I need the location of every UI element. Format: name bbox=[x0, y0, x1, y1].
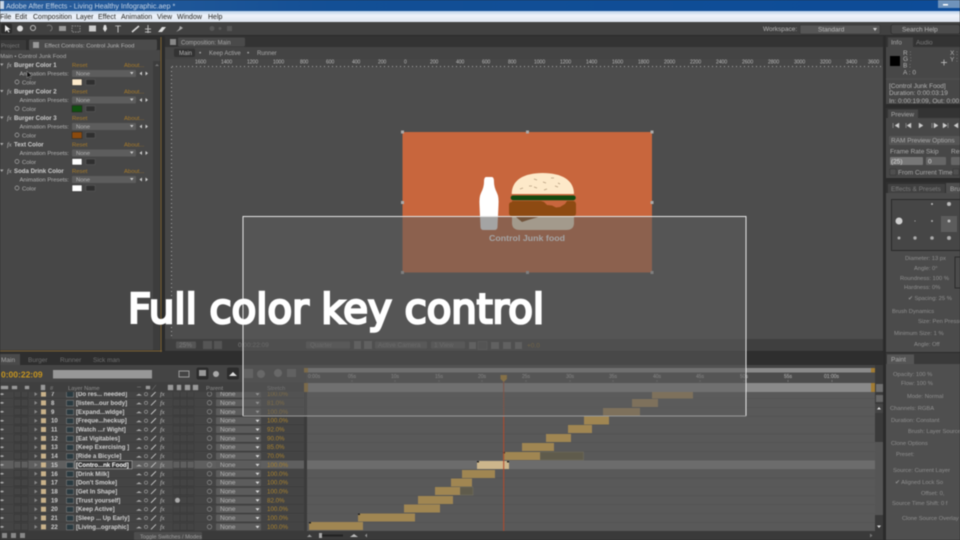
viewer controls bbox=[165, 339, 883, 351]
comp ruler: 600 bbox=[326, 60, 335, 66]
effect: Soda Drink Color: About... bbox=[124, 169, 145, 175]
effect: Burger Color 3: None bbox=[76, 124, 91, 130]
row 12: [Eat Vigitables] bbox=[76, 435, 120, 442]
panel: brushes: Diameter: 13 px bbox=[905, 256, 946, 262]
row 15 selected: [Contro...nk Food] bbox=[76, 462, 129, 469]
panel: brushes bbox=[886, 182, 960, 352]
effect: Burger Color 1: Animation Presets: bbox=[20, 72, 69, 78]
panel: brushes: Minimum Size: 1 % bbox=[894, 331, 944, 337]
row 16: 16 bbox=[51, 471, 58, 478]
row 11: 92.0% bbox=[267, 426, 285, 434]
comp ruler: 1600 bbox=[195, 60, 206, 66]
row 15 selected: 15 bbox=[51, 462, 58, 469]
panel: preview: (25) bbox=[891, 158, 903, 166]
row 16: [Drink Milk] bbox=[76, 471, 109, 478]
comp ruler: 2800 bbox=[768, 60, 779, 66]
effect: Burger Color 1: Reset bbox=[72, 63, 88, 69]
time ruler: 20s bbox=[478, 374, 487, 380]
effect: Text Color: Color bbox=[22, 160, 36, 166]
viewer controls: +0.0 bbox=[527, 342, 540, 350]
row 17: [Don't Smoke] bbox=[76, 480, 117, 487]
viewer controls: 25% bbox=[179, 342, 192, 349]
row 22: [Living...ographic] bbox=[76, 524, 129, 531]
panel: paint: Mode: Normal bbox=[907, 394, 943, 400]
menu bar: Composition bbox=[33, 14, 72, 21]
window title bar: Adobe After Effects - Living Healthy Infographic.aep * bbox=[6, 2, 175, 10]
row 12 bbox=[0, 435, 306, 442]
time ruler: 10s bbox=[391, 374, 400, 380]
effect: Burger Color 3: Burger Color 3 bbox=[14, 115, 57, 122]
menu bar: View bbox=[157, 14, 173, 21]
row 22: fx bbox=[160, 524, 165, 531]
row 9: [Expand...wldge] bbox=[76, 409, 124, 416]
time ruler: 50s bbox=[740, 374, 749, 380]
row 19: None bbox=[220, 497, 236, 504]
row 19: [Trust yourself] bbox=[76, 497, 120, 504]
panel: right column info: [Control Junk Food] bbox=[889, 83, 946, 90]
row 20: [Keep Active] bbox=[76, 506, 115, 513]
row 21: None bbox=[220, 515, 236, 522]
row 8: [listen...our body] bbox=[76, 400, 127, 407]
panel: preview bbox=[886, 108, 960, 178]
panel: preview: From Current Time bbox=[898, 170, 953, 176]
viewer controls: 0:00:22:09 bbox=[238, 342, 269, 349]
row 17: 17 bbox=[51, 480, 58, 487]
comp ruler: 1600 bbox=[612, 60, 623, 66]
row 17: 100.0% bbox=[267, 480, 288, 487]
row 20: None bbox=[220, 506, 236, 513]
row 11: None bbox=[220, 426, 236, 434]
timeline tabs bbox=[0, 352, 883, 365]
comp ruler: 1200 bbox=[247, 60, 258, 66]
row 21: 21 bbox=[51, 515, 58, 522]
effect: Text Color: About... bbox=[124, 142, 145, 148]
row 10: 10 bbox=[51, 418, 58, 425]
headline: Full color key control: Full color key control bbox=[128, 285, 544, 333]
effect: Burger Color 2: Burger Color 2 bbox=[14, 88, 57, 96]
row 19: fx bbox=[160, 497, 165, 504]
panel: paint: Offset: 0, bbox=[921, 491, 945, 497]
time ruler: 25s bbox=[522, 374, 531, 380]
row 18: 18 bbox=[51, 488, 58, 496]
effect: Burger Color 2 bbox=[0, 88, 148, 113]
row 19 bbox=[0, 497, 306, 504]
menu bar: Effect bbox=[98, 14, 116, 21]
time ruler: 30s bbox=[566, 374, 575, 380]
timeline footer bbox=[0, 531, 883, 540]
row 15 selected: fx bbox=[160, 462, 165, 469]
panel: effect controls: Project bbox=[1, 44, 20, 50]
comp ruler: 800 bbox=[300, 60, 309, 66]
row 18 bbox=[0, 488, 306, 496]
comp ruler: 1000 bbox=[273, 60, 284, 66]
row 10: [Freque...heckup] bbox=[76, 418, 127, 425]
row 21: 100.0% bbox=[267, 515, 288, 522]
panel: right column info: A : 0 bbox=[903, 70, 916, 76]
caption: Control Junk food bbox=[489, 233, 565, 243]
effect: Burger Color 3: fx bbox=[7, 115, 12, 122]
row 12: 12 bbox=[51, 435, 58, 442]
row 22: 22 bbox=[51, 524, 58, 531]
time navigator bbox=[304, 368, 875, 372]
panel: preview: Frame Rate bbox=[890, 148, 925, 156]
row 22: 100.0% bbox=[267, 524, 288, 531]
panel: right column info: R : bbox=[903, 50, 912, 57]
work area bar bbox=[304, 383, 875, 392]
comp ruler: 800 bbox=[508, 60, 517, 66]
panel: paint: Paint bbox=[891, 356, 906, 364]
row 19: 82.0% bbox=[267, 497, 285, 504]
toolbar: Workspace: bbox=[763, 26, 797, 33]
panel: paint: Duration: Constant bbox=[891, 418, 940, 424]
panel: right column info: Info bbox=[891, 40, 902, 46]
row 17: fx bbox=[160, 480, 165, 487]
time ruler: 45s bbox=[696, 374, 705, 380]
menu bar bbox=[0, 11, 960, 22]
effect: Burger Color 3: Color bbox=[22, 134, 36, 140]
timeline tabs: Main bbox=[1, 357, 15, 364]
effect: Burger Color 2: None bbox=[76, 98, 91, 104]
effect: Burger Color 3: About... bbox=[124, 116, 145, 122]
menu bar: Layer bbox=[76, 14, 94, 21]
row 22: None bbox=[220, 524, 236, 531]
orange frame bbox=[402, 132, 652, 272]
toolbar: Search Help bbox=[902, 26, 938, 34]
row 20 bbox=[0, 506, 306, 513]
panel: right column info: Duration: 0:00:03:19 bbox=[889, 90, 948, 97]
icon: burger bbox=[509, 173, 576, 230]
panel: preview: 0 bbox=[928, 158, 932, 166]
panel: paint: Clone Options bbox=[891, 441, 928, 447]
panel: brushes: Angle: 0° bbox=[914, 266, 938, 272]
panel: paint: ✔ Aligned Lock So bbox=[895, 480, 943, 486]
viewer controls: Active Camera bbox=[378, 342, 421, 349]
row 14 bbox=[0, 452, 285, 460]
row 15 selected: 100.0% bbox=[267, 462, 288, 469]
layer search bbox=[53, 370, 152, 378]
effect: Burger Color 1 bbox=[0, 62, 148, 86]
comp ruler bbox=[165, 59, 883, 339]
time ruler: 40s bbox=[653, 374, 662, 380]
time ruler: 15s bbox=[435, 374, 444, 380]
comp ruler: 1400 bbox=[221, 60, 232, 66]
effect: Soda Drink Color: Color bbox=[22, 186, 36, 192]
viewer controls: 1 View bbox=[434, 342, 454, 349]
row 21: fx bbox=[160, 515, 165, 522]
comp ruler: 2400 bbox=[716, 60, 727, 66]
row 9: 100.0% bbox=[267, 409, 288, 416]
effect: Text Color: None bbox=[76, 151, 91, 157]
panel: composition viewer: • bbox=[199, 50, 202, 57]
row 19: 19 bbox=[51, 497, 58, 504]
row 16: 100.0% bbox=[267, 471, 288, 478]
row 9: fx bbox=[160, 409, 165, 416]
row 14: 70.0% bbox=[267, 453, 285, 460]
panel: effect controls: Main • Control Junk Food bbox=[0, 54, 66, 60]
panel: preview: Skip bbox=[926, 148, 939, 156]
toolbar: T bbox=[115, 24, 121, 36]
row 22 bbox=[0, 523, 306, 531]
row 20: 20 bbox=[51, 506, 58, 513]
column headers: Stretch bbox=[267, 386, 285, 392]
comp ruler: 400 bbox=[456, 60, 465, 66]
comp ruler: 400 bbox=[352, 60, 361, 66]
comp ruler: 2200 bbox=[690, 60, 701, 66]
row 10: None bbox=[220, 418, 236, 425]
panel: right column info bbox=[886, 36, 960, 540]
effect: Soda Drink Color: Soda Drink Color bbox=[14, 168, 64, 175]
effect: Text Color: Reset bbox=[72, 142, 88, 148]
row 8: 81.0% bbox=[267, 400, 285, 407]
comp ruler: 3200 bbox=[820, 60, 831, 66]
column headers: # bbox=[50, 386, 54, 392]
translucent callout overlay bbox=[243, 216, 746, 416]
row 11 bbox=[0, 426, 285, 434]
effect: Soda Drink Color: fx bbox=[7, 168, 12, 175]
panel: paint bbox=[886, 353, 960, 540]
timeline tabs: Runner bbox=[60, 357, 82, 364]
viewer controls: Quarter bbox=[310, 342, 333, 349]
row 13: None bbox=[220, 444, 236, 451]
row 10: 100.0% bbox=[267, 418, 288, 425]
panel: composition viewer: Composition: Main bbox=[181, 40, 231, 46]
column headers bbox=[0, 382, 306, 392]
row 21: [Sleep ... Up Early] bbox=[76, 515, 130, 522]
time ruler: 0:00s bbox=[308, 374, 321, 380]
comp ruler: 600 bbox=[482, 60, 491, 66]
panel: right column info: B : bbox=[903, 62, 911, 70]
panel: brushes: Effects & Presets bbox=[891, 186, 941, 193]
row 7: [Do res... needed] bbox=[76, 391, 127, 398]
row 11: 11 bbox=[51, 426, 58, 434]
row 18: [Get In Shape] bbox=[76, 488, 117, 496]
comp ruler: 200 bbox=[430, 60, 439, 66]
row 14: [Ride a Bicycle] bbox=[76, 453, 121, 460]
row 20: 100.0% bbox=[267, 506, 288, 513]
effect: Text Color: fx bbox=[7, 142, 12, 148]
effect: Burger Color 2: Color bbox=[22, 107, 36, 113]
row 15 selected: None bbox=[220, 462, 236, 469]
toolbar: Standard bbox=[818, 26, 845, 34]
comp ruler: 1200 bbox=[560, 60, 571, 66]
effect: Burger Color 2: About... bbox=[124, 90, 145, 96]
menu bar: Animation bbox=[121, 14, 152, 21]
row 17: None bbox=[220, 480, 236, 487]
time ruler: 55s bbox=[784, 374, 793, 380]
effect: Text Color: Animation Presets: bbox=[20, 151, 69, 157]
time ruler: 35s bbox=[609, 374, 618, 380]
comp ruler: 2600 bbox=[742, 60, 753, 66]
row 7: fx bbox=[160, 391, 165, 398]
panel: effect controls: Effect Controls: Control Junk Food bbox=[44, 44, 134, 50]
effect: Soda Drink Color: Reset bbox=[72, 169, 88, 175]
time ruler bbox=[306, 372, 875, 383]
panel: paint: Source Time Shift: 0 f bbox=[892, 501, 948, 507]
effect: Burger Color 1: Burger Color 1 bbox=[14, 62, 57, 69]
row 11: fx bbox=[160, 426, 165, 434]
panel: brushes: ✔ Spacing: 25 % bbox=[908, 296, 952, 302]
panel: paint: Source: Current Layer bbox=[893, 468, 950, 474]
panel: composition viewer bbox=[165, 36, 883, 351]
effect: Burger Color 1: None bbox=[76, 72, 91, 78]
effect: Text Color bbox=[0, 142, 148, 166]
row 9 bbox=[0, 408, 306, 416]
effect: Text Color: Text Color bbox=[14, 142, 44, 148]
panel: brushes: Brush Dynamics bbox=[892, 309, 934, 315]
effect: Burger Color 3: Animation Presets: bbox=[20, 124, 69, 130]
comp ruler: 1000 bbox=[534, 60, 545, 66]
row 18: fx bbox=[160, 488, 165, 496]
menu bar: Window bbox=[177, 14, 203, 21]
column headers: Parent bbox=[206, 386, 223, 392]
comp ruler: 3400 bbox=[846, 60, 857, 66]
panel: right column info: G : bbox=[903, 56, 912, 63]
row 9: 9 bbox=[51, 409, 55, 416]
row 12: None bbox=[220, 435, 236, 442]
layer duration bars bbox=[309, 392, 693, 530]
effect: Burger Color 1: fx bbox=[7, 62, 12, 69]
effect: Burger Color 1: About... bbox=[124, 63, 145, 69]
panel: paint: Flow: 100 % bbox=[901, 381, 933, 387]
row 18: None bbox=[220, 488, 236, 496]
playhead bbox=[500, 375, 507, 531]
row 13: [Keep Exercising ] bbox=[76, 444, 129, 451]
comp ruler: 1800 bbox=[638, 60, 649, 66]
row 10: fx bbox=[160, 418, 165, 425]
row 16 bbox=[0, 470, 306, 478]
row 16: None bbox=[220, 471, 236, 478]
toolbar bbox=[0, 22, 960, 36]
row 7: 7 bbox=[51, 391, 55, 398]
layer rows bbox=[0, 390, 306, 531]
timeline tabs: Burger bbox=[28, 357, 48, 364]
time ruler: 05s bbox=[348, 374, 357, 380]
panel: brushes: Hardness: 0% bbox=[904, 285, 940, 291]
panel: brushes: Roundness: 100 % bbox=[900, 276, 949, 282]
row 13: 85.0% bbox=[267, 444, 285, 451]
row 7: None bbox=[220, 391, 236, 398]
row 9: None bbox=[220, 409, 236, 416]
row 16: fx bbox=[160, 471, 165, 478]
row 20: fx bbox=[160, 506, 165, 513]
menu bar: Help bbox=[208, 14, 223, 21]
effect: Burger Color 1: Color bbox=[22, 80, 36, 86]
comp ruler: 0 bbox=[404, 60, 407, 66]
effect: Soda Drink Color bbox=[0, 168, 148, 192]
comp ruler: 3600 bbox=[868, 60, 879, 66]
menu bar: File bbox=[0, 14, 11, 21]
effect: Soda Drink Color: Animation Presets: bbox=[20, 178, 69, 184]
cursor bbox=[27, 71, 32, 79]
comp ruler: 200 bbox=[378, 60, 387, 66]
timecode: 0:00:22:09 bbox=[1, 370, 43, 380]
timeline tabs: Sick man bbox=[93, 357, 120, 364]
row 11: [Watch ...r Wight] bbox=[76, 426, 126, 434]
row 13 bbox=[0, 444, 285, 451]
row 7 bbox=[0, 391, 288, 398]
row 17 bbox=[0, 479, 306, 487]
timeline switches bbox=[179, 368, 296, 380]
timeline scrollbar bbox=[875, 365, 883, 531]
menu bar: Edit bbox=[15, 14, 27, 21]
panel: paint: Preset: bbox=[896, 452, 915, 458]
effect: Burger Color 2: Animation Presets: bbox=[20, 98, 69, 104]
panel: composition viewer: Main bbox=[179, 51, 192, 57]
effect: Burger Color 3: Reset bbox=[72, 116, 88, 122]
column headers: Layer Name bbox=[68, 386, 100, 392]
row 10 bbox=[0, 417, 306, 425]
panel: paint: Opacity: 100 % bbox=[893, 372, 932, 378]
timeline track area bbox=[304, 365, 883, 531]
row 21 bbox=[0, 514, 306, 522]
panel: composition viewer: • bbox=[247, 50, 250, 57]
row 13: 13 bbox=[51, 444, 58, 451]
panel: paint: Clone Source Overlay bbox=[902, 516, 959, 522]
row 12: 90.0% bbox=[267, 435, 285, 442]
effect: Burger Color 3 bbox=[0, 115, 148, 140]
panel: preview: Preview bbox=[891, 112, 914, 118]
comp ruler: 1400 bbox=[586, 60, 597, 66]
comp ruler: 2000 bbox=[664, 60, 675, 66]
panel: composition viewer: Keep Active bbox=[209, 51, 241, 57]
row 13: fx bbox=[160, 444, 165, 451]
panel: timeline bbox=[0, 352, 883, 540]
time ruler: 01:00s bbox=[824, 374, 840, 380]
row 8: 8 bbox=[51, 400, 55, 407]
panel: effect controls bbox=[0, 37, 162, 352]
row 14: fx bbox=[160, 453, 165, 460]
row 15 selected bbox=[0, 460, 306, 469]
effect: Soda Drink Color: None bbox=[76, 178, 91, 184]
panel: brushes: Angle: Off bbox=[914, 342, 940, 348]
row 8: fx bbox=[160, 400, 165, 407]
window title bar bbox=[0, 0, 960, 11]
panel: composition viewer: Runner bbox=[257, 51, 277, 57]
panel: paint: Channels: RGBA bbox=[890, 406, 934, 412]
panel: preview: RAM Preview Options bbox=[891, 138, 955, 144]
icon: soda bottle bbox=[479, 177, 499, 230]
row 14: None bbox=[220, 453, 236, 460]
row 14: 14 bbox=[51, 453, 58, 460]
row 12: fx bbox=[160, 435, 165, 442]
panel: right column info: Audio bbox=[916, 40, 933, 46]
composition artwork bbox=[401, 130, 654, 274]
row 7: 100.0% bbox=[267, 391, 288, 398]
row 8: None bbox=[220, 400, 236, 407]
row 18: 100.0% bbox=[267, 488, 288, 496]
comp ruler: 3000 bbox=[794, 60, 805, 66]
effect: Burger Color 2: Reset bbox=[72, 90, 88, 96]
effect: Burger Color 2: fx bbox=[7, 88, 12, 96]
row 8 bbox=[0, 399, 306, 407]
